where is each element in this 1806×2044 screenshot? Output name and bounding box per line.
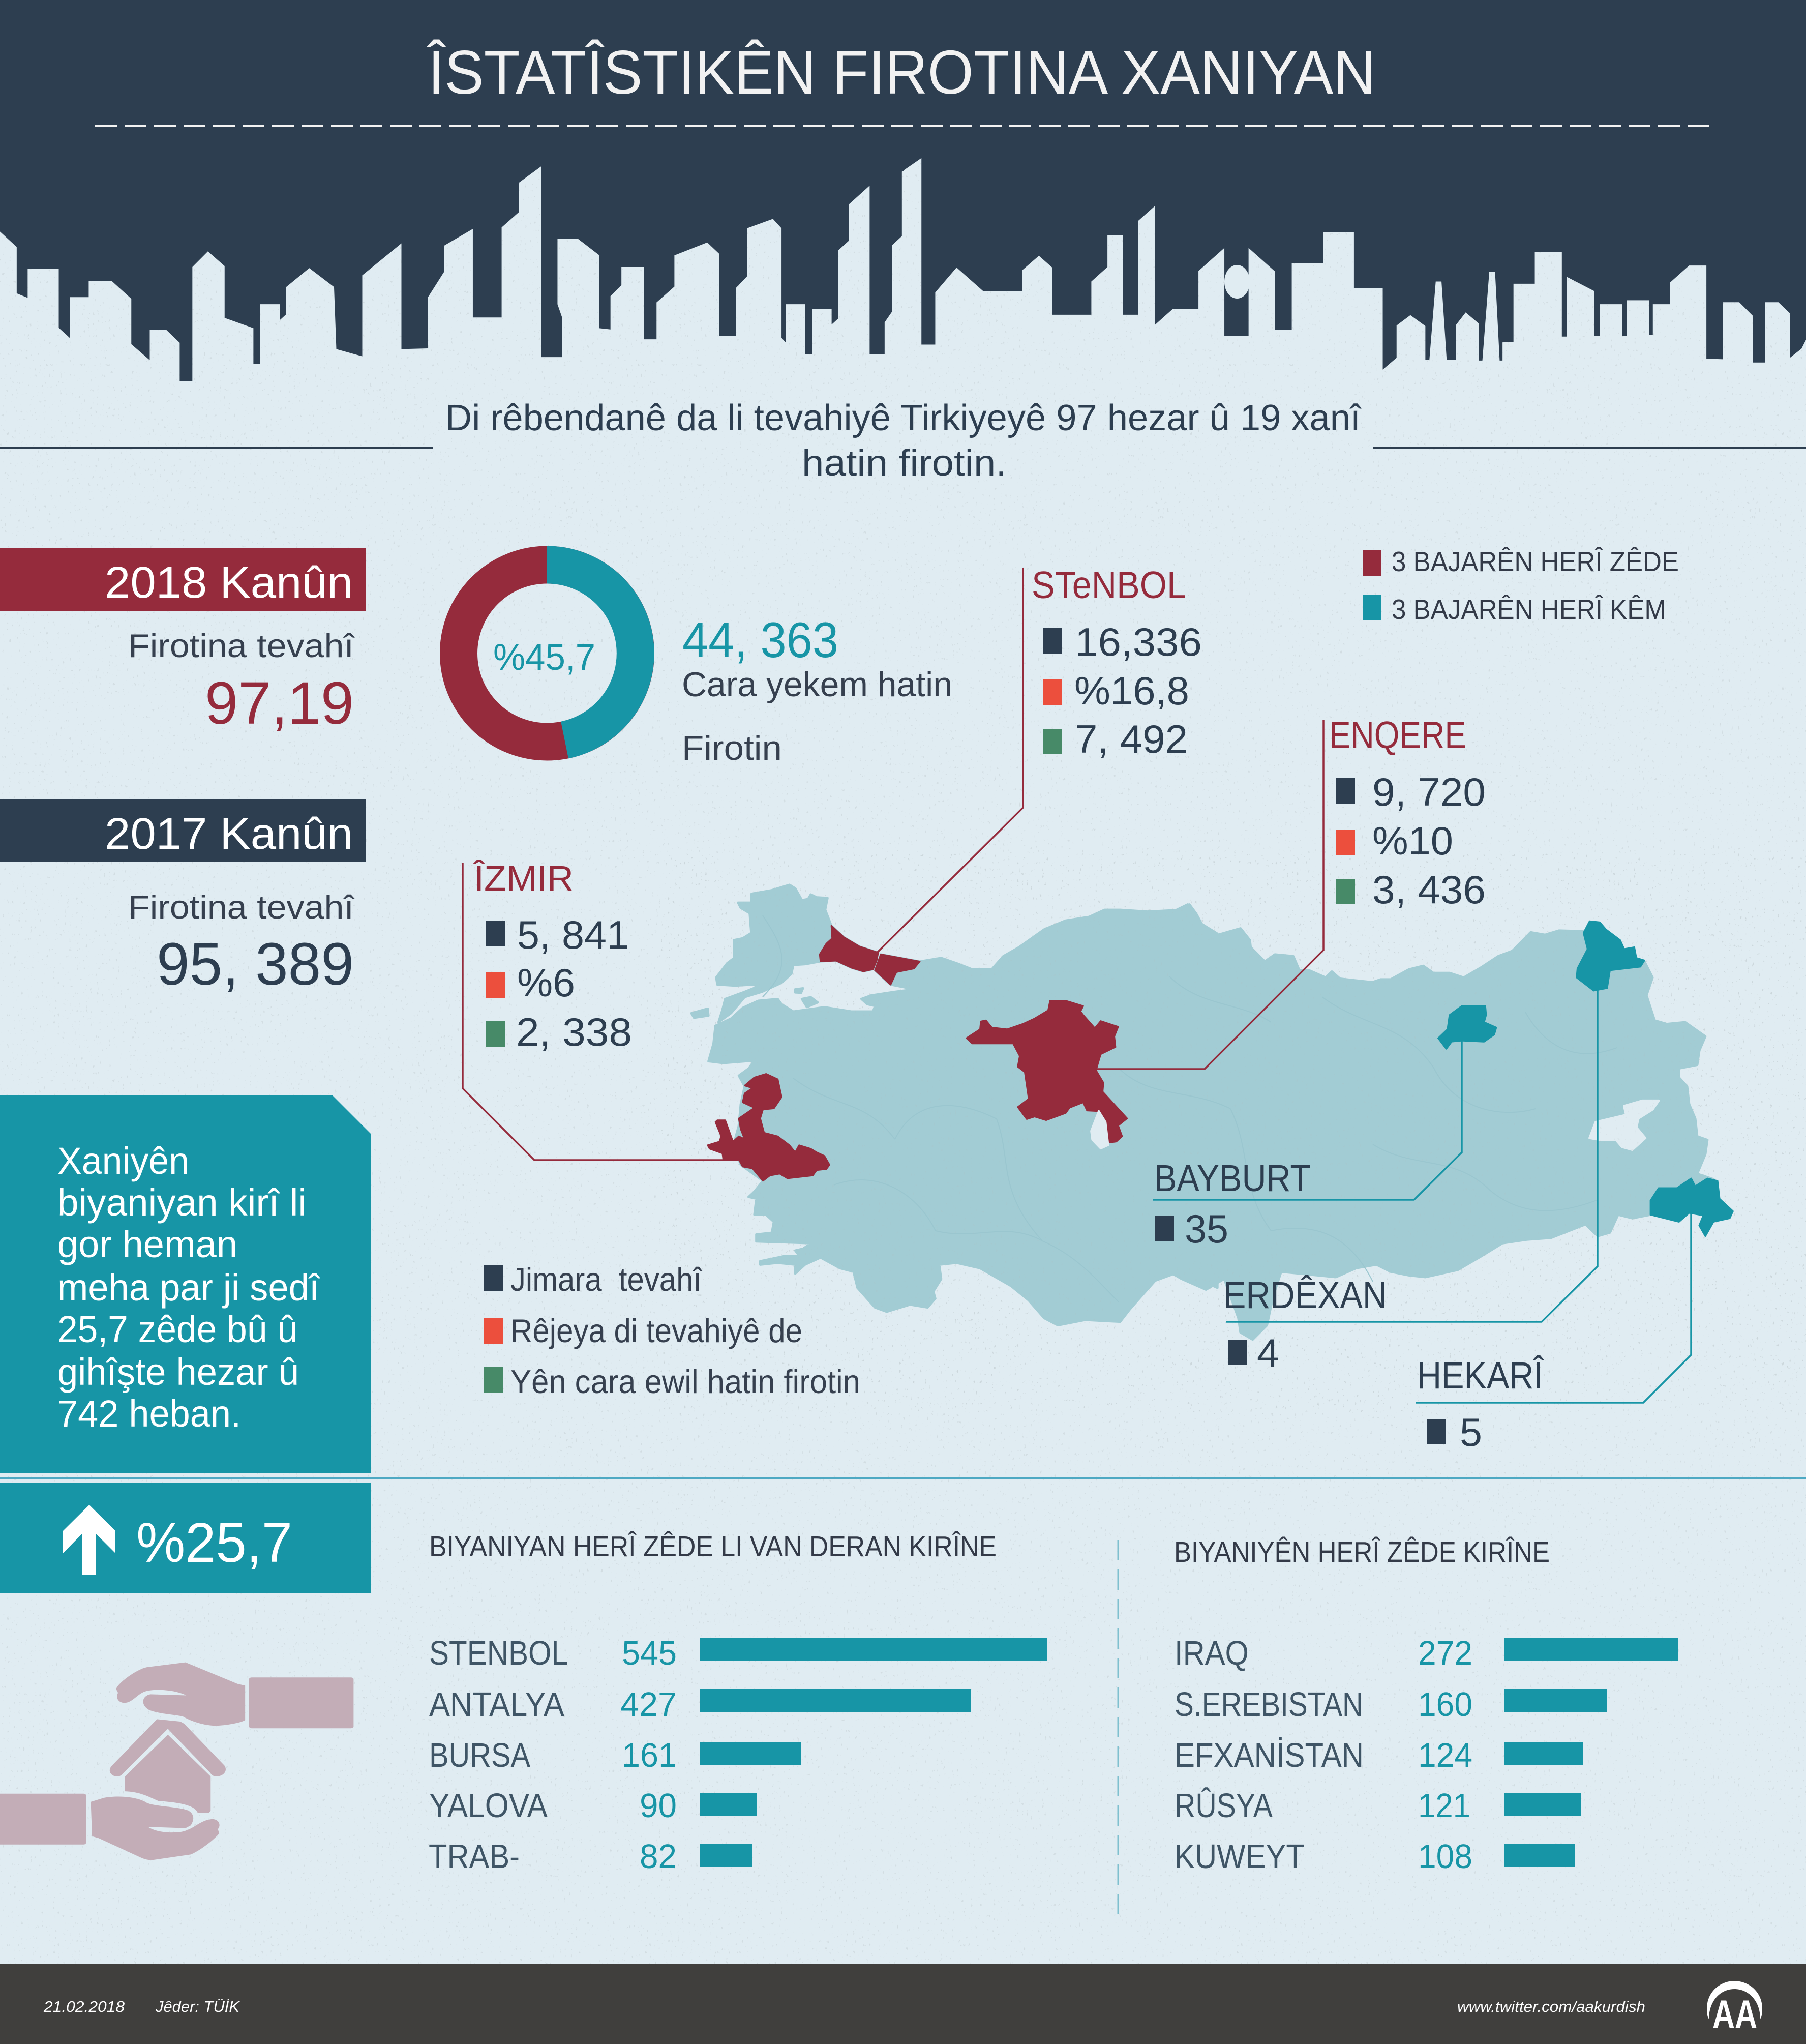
bar chart: buyers by city [429,1530,1047,1876]
increase panel [0,1483,371,1593]
icon: AA logo [1707,1981,1762,2036]
bar chart: buyers by city: 82 [640,1838,677,1876]
bar chart: buyers by city: 427 [620,1685,677,1724]
Istanbul region [820,926,920,985]
Izmir region [708,1074,829,1181]
map legend [484,1261,860,1400]
panel: 2018 sales [0,548,366,737]
callout: Ardahan [1223,988,1598,1375]
callout panel: foreign sales: gihîşte hezar û [57,1351,299,1393]
Bayburt, Ardahan and Hakkari regions [1438,921,1733,1236]
Lake Van [1589,1101,1659,1150]
callout: Ankara [1096,714,1486,1069]
donut chart: %45,7 [493,637,595,678]
callout: Izmir: ÎZMIR [473,858,574,898]
bar chart: buyers by country: S.EREBISTAN [1175,1685,1363,1724]
callout panel: foreign sales [0,1095,371,1473]
bar chart: buyers by city: 90 [640,1787,677,1825]
footer: Jêder: TÜİK [155,1998,240,2016]
callout: Ardahan: ERDÊXAN [1223,1274,1387,1316]
first hand sales figure: Firotin [682,729,782,767]
panel: 2017 sales [0,799,366,998]
legend: most and least cities: 3 BAJARÊN HERÎ ZÊDE [1392,546,1679,577]
icon: hands holding house [0,1663,353,1860]
icon: AA logo: AA [1712,1992,1757,2036]
callout: Istanbul: 7, 492 [1075,717,1188,761]
callout: Hakkari [1416,1213,1691,1455]
footer [0,1964,1806,2044]
footer: 21.02.2018 [43,1998,125,2016]
callout: Ardahan: 4 [1257,1330,1279,1375]
callout: Bayburt: BAYBURT [1154,1157,1311,1199]
bar chart: buyers by city: TRAB- [429,1838,520,1876]
bar chart: buyers by country: 108 [1418,1838,1472,1876]
panel: 2017 sales: 2017 Kanûn [105,809,353,858]
bar chart: buyers by city: 545 [622,1634,677,1672]
callout: Istanbul [877,564,1202,953]
callout panel: foreign sales: Xaniyên [57,1140,189,1182]
callout panel: foreign sales: biyaniyan kirî li [57,1181,307,1224]
first hand sales figure: 44, 363 [682,612,838,668]
bar chart: buyers by city: 161 [622,1736,677,1774]
bar chart: buyers by country: KUWEYT [1175,1838,1305,1876]
bar chart: buyers by country: 160 [1418,1685,1472,1724]
callout: Izmir: 2, 338 [516,1010,632,1054]
Ankara region [967,1001,1127,1149]
callout panel: foreign sales: meha par ji sedî [57,1266,320,1309]
panel: 2017 sales: 95, 389 [157,931,354,998]
bar chart: buyers by country: 121 [1418,1787,1470,1825]
heading bar 2017 [0,799,366,862]
bar chart: buyers by country: BIYANIYÊN HERÎ ZÊDE KIRÎNE [1174,1536,1550,1568]
bar chart: buyers by city: STENBOL [429,1634,568,1672]
map legend: Yên cara ewil hatin firotin [510,1363,860,1400]
map legend: Jimara tevahî [510,1261,703,1298]
callout: Ankara: ENQERE [1329,714,1466,756]
bar chart: buyers by country: EFXANİSTAN [1175,1736,1364,1774]
callout: Istanbul: STeNBOL [1032,564,1186,606]
callout: Ankara: 3, 436 [1372,867,1486,912]
callout: Izmir: 5, 841 [517,912,629,957]
footer: www.twitter.com/aakurdish [1457,1998,1645,2016]
callout: Izmir [463,858,739,1160]
callout: Bayburt [1153,1041,1462,1251]
map legend: Rêjeya di tevahiyê de [510,1312,802,1349]
callout: Ankara: 9, 720 [1372,769,1486,814]
bar chart: buyers by country: 124 [1418,1736,1472,1774]
bar chart: buyers by country: RÛSYA [1175,1787,1273,1825]
callout panel: foreign sales: 25,7 zêde bû û [57,1308,297,1350]
bar chart: buyers by city: YALOVA [429,1787,548,1825]
callout: Istanbul: %16,8 [1074,668,1189,713]
callout: Izmir: %6 [517,960,575,1005]
first hand sales figure [682,612,952,767]
callout panel: foreign sales: 742 heban. [57,1393,241,1435]
panel: 2018 sales: 97,19 [205,670,354,737]
callout: Bayburt: 35 [1185,1206,1228,1251]
icon: up arrow [63,1505,115,1575]
callout: Istanbul: 16,336 [1075,619,1202,664]
heading bar 2018 [0,548,366,611]
bar chart: buyers by country: IRAQ [1175,1634,1249,1672]
bar chart: buyers by city: ANTALYA [429,1685,564,1724]
legend: most and least cities: 3 BAJARÊN HERÎ KÊM [1392,594,1666,625]
donut chart [459,565,636,742]
panel: 2018 sales: Firotina tevahî [128,627,355,664]
header skyline [0,0,1806,381]
intro text [445,398,1362,484]
bar chart: buyers by country: 272 [1418,1634,1472,1672]
increase panel: %25,7 [136,1512,292,1574]
intro text: Di rêbendanê da li tevahiyê Tirkiyeyê 97 hezar û 19 xanî [445,398,1362,438]
callout panel: foreign sales: gor heman [57,1223,237,1265]
intro text: hatin firotin. [802,443,1007,484]
callout: Hakkari: 5 [1460,1410,1482,1455]
panel: 2017 sales: Firotina tevahî [128,888,355,926]
callout: Hakkari: HEKARÎ [1417,1354,1544,1397]
first hand sales figure: Cara yekem hatin [682,665,952,704]
legend: most and least cities [1363,546,1679,625]
bar chart: buyers by country [1174,1536,1678,1876]
panel: 2018 sales: 2018 Kanûn [105,558,353,607]
bar chart: buyers by city: BIYANIYAN HERÎ ZÊDE LI VAN DERAN KIRÎNE [429,1530,997,1563]
bar chart: buyers by city: BURSA [429,1736,530,1774]
callout: Ankara: %10 [1372,818,1453,863]
map of Turkey [661,854,1806,1414]
title: ÎSTATÎSTIKÊN FIROTINA XANIYAN [427,38,1376,107]
